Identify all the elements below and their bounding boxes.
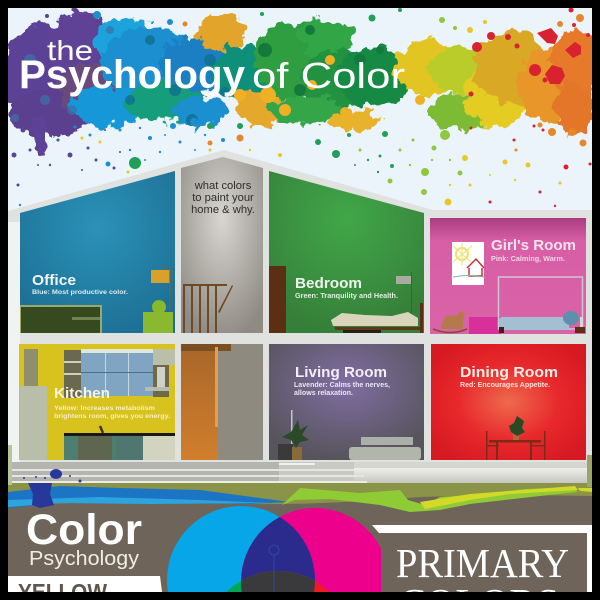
dining room heading: Dining Room [460,364,558,381]
living room caption: Lavender: Calms the nerves, [294,382,390,389]
living room caption second line: allows relaxation. [294,390,353,397]
color psychology title [26,506,142,570]
right grass edge [587,455,592,487]
bedside lamp [396,272,412,322]
main title [19,35,405,97]
rocking horse [433,311,467,332]
green paint streak [282,486,592,512]
living room heading: Living Room [295,364,387,381]
room: Living Room [269,344,424,460]
table plant [509,416,525,440]
bedroom heading: Bedroom [295,275,362,292]
counter and cabinets [64,433,175,460]
upper cupboard [24,349,38,386]
inner wall highlight [8,222,20,462]
bed frame [498,277,582,329]
primary colors panel [372,525,592,600]
room: Office [20,171,175,333]
girl's room heading: Girl's Room [491,237,576,254]
pink chest [469,317,501,334]
house shell and roof [8,150,592,484]
blue blanket [499,311,585,333]
cyan circle [167,506,315,600]
room: Girl's Room [430,218,586,334]
overlap navy [241,517,315,581]
left grass edge [8,445,12,485]
title word Psychology: Psychology [19,53,246,97]
primary colors text: PRIMARY [396,540,569,586]
floor lamp [151,268,170,310]
stairwell tagline: home & why. [191,204,255,216]
fridge [20,386,47,460]
venn diagram: primary colors [167,506,381,592]
sofa [349,437,421,460]
grass strip [8,482,592,512]
kitchen heading: Kitchen [54,385,110,402]
room: Dining Room [431,344,586,460]
potted plant [278,410,309,460]
room: Kitchen [19,344,175,460]
title word Color: Color [26,506,142,554]
dining room caption: Red: Encourages Appetite. [460,382,550,389]
house [8,150,592,484]
paint splatter banner [2,8,600,207]
office heading: Office [32,272,76,289]
kitchen caption second line: brightens room, gives you energy. [54,413,170,420]
kitchen caption: Yellow: Increases metabolism [54,405,155,412]
blue paint streak [8,469,290,508]
stairwell tagline: to paint your [192,192,254,204]
title word Psychology: Psychology [29,547,140,570]
title word the: the [47,35,93,66]
staircase [181,344,231,460]
range hood [145,349,175,397]
child's drawing [452,242,484,285]
wardrobe [269,266,286,333]
bedroom caption: Green: Tranquility and Health. [295,293,398,300]
yellow circle overlap red [241,571,330,592]
dining table and chairs [486,431,546,460]
tap [100,426,103,433]
stair railing [183,284,233,333]
girl's room caption: Pink: Calming, Warm. [491,256,565,263]
cabinet [20,305,102,333]
room: upper stairwell [181,157,263,333]
green armchair [143,300,173,333]
bed [331,303,423,333]
stairwell tagline: what colors [195,180,251,192]
yellow circle overlap green [226,571,315,592]
center dark overlap [241,571,315,592]
blob shading [11,26,114,122]
title words of Color: of Color [252,55,405,96]
front steps and foundation [12,462,587,483]
room: lower stairwell [181,344,263,460]
room: Bedroom [269,171,424,333]
magenta circle [241,508,389,600]
office caption: Blue: Most productive color. [32,289,128,296]
brown ground [8,495,592,592]
shelves [64,350,81,398]
kitchen window [81,349,153,396]
yellow label banner [8,576,162,600]
venn center mark [269,545,279,592]
